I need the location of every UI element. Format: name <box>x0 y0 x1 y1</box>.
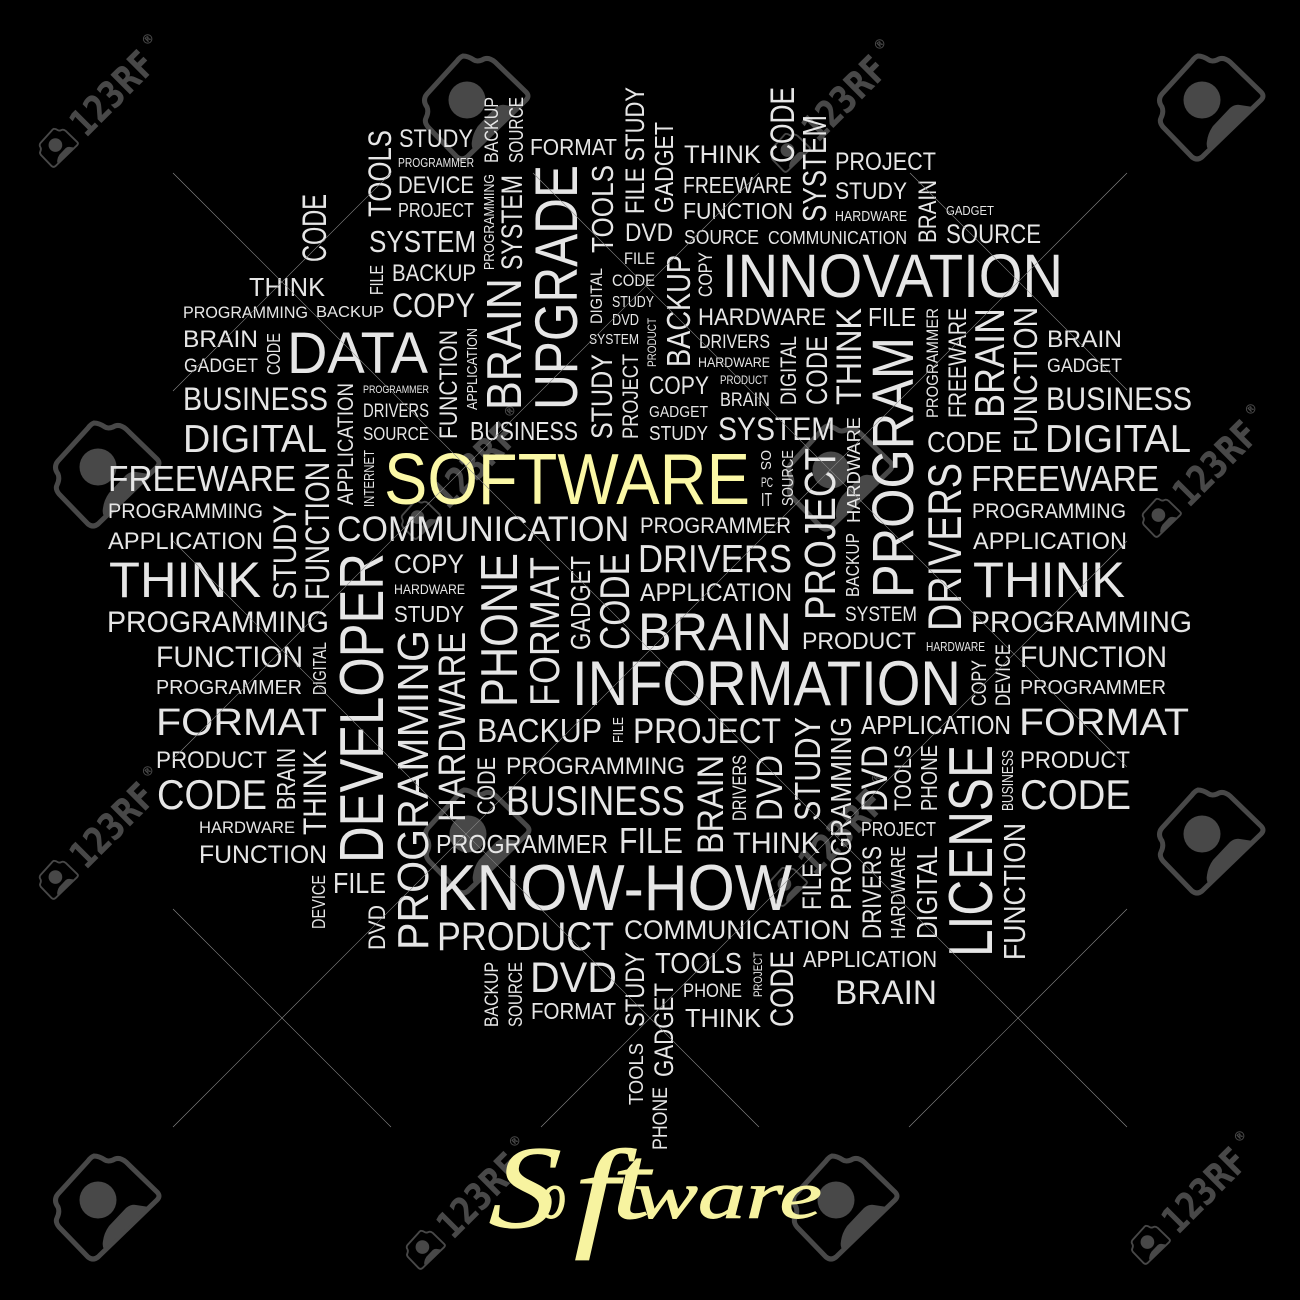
word: top-right words: FUNCTION <box>683 198 793 224</box>
word: center words: IT <box>761 490 772 510</box>
word: top-left vertical words: FILE STUDY <box>620 87 650 214</box>
word: top-right words: COMMUNICATION <box>768 228 907 248</box>
word: bottom words: BACKUP <box>482 962 503 1027</box>
word: lower center words: HARDWARE <box>432 632 474 822</box>
word: lower center words: PROGRAMMING <box>389 630 438 950</box>
word: top-right words: PROGRAMMER <box>923 308 942 418</box>
word: top-left horizontal words: PROJECT <box>398 200 474 222</box>
word: left column words: DATA <box>287 321 428 386</box>
word: left column words: FREEWARE <box>108 458 296 499</box>
title: Software: o <box>540 1157 566 1233</box>
word: top-left vertical words: TOOLS <box>362 130 398 217</box>
word: top-left vertical words <box>333 87 717 507</box>
word: top-right words: CODE <box>927 427 1002 459</box>
word: top-right words: CODE <box>801 336 834 405</box>
word: top-left horizontal words: GADGET <box>649 404 708 421</box>
word: top-right words: HARDWARE <box>698 354 770 370</box>
word: top-left vertical words: PRODUCT <box>645 317 659 367</box>
word: left column words: FUNCTION <box>199 841 327 869</box>
word: top-left horizontal words: COPY <box>649 372 709 400</box>
word: center words: COMMUNICATION <box>337 510 629 549</box>
word: top-left vertical words: BACKUP <box>482 97 503 163</box>
word: right column words: DIGITAL <box>1045 418 1191 461</box>
word: bottom words: GADGET <box>649 983 679 1077</box>
word: left column words: BACKUP <box>316 304 384 321</box>
word: top-left vertical words: APPLICATION <box>333 383 358 505</box>
word: center words: FORMAT <box>521 557 568 706</box>
word: left column words: PROGRAMMING <box>107 606 329 639</box>
word: top-left vertical words: APPLICATION <box>464 328 481 410</box>
word: center words: PHONE <box>471 553 529 707</box>
word: center words: PROGRAMMER <box>640 513 791 538</box>
word: top-left vertical words: INTERNET <box>361 450 378 507</box>
word: top-left horizontal words: STUDY <box>399 125 473 153</box>
word: center words: PRODUCT <box>802 628 916 655</box>
word: lower center words <box>389 630 1011 950</box>
word: left column words: CODE <box>264 333 284 375</box>
word: right column words: PROGRAMMING <box>972 500 1126 523</box>
word cloud <box>107 87 1192 1150</box>
word: top-right words: PROJECT <box>835 148 936 176</box>
word: left column words: BRAIN <box>271 748 301 810</box>
word: left column words: THINK <box>297 750 333 835</box>
word: bottom words: TOOLS <box>655 948 742 980</box>
word: lower center words: PROGRAMMER <box>436 829 608 859</box>
word: lower center words: BRAIN <box>690 755 731 854</box>
word: lower center words: DVD <box>749 755 790 821</box>
word: right column words: FUNCTION <box>1020 641 1167 674</box>
word: right column words: DEVICE <box>992 644 1015 706</box>
word: bottom words: FORMAT <box>531 998 616 1024</box>
word: top-right words: HARDWARE <box>698 304 826 331</box>
word: top-right words: STUDY <box>835 178 907 205</box>
word: lower center words: PROGRAMMING <box>826 717 858 910</box>
word: left column words: HARDWARE <box>199 818 295 837</box>
word: lower center words: FILE <box>610 717 627 743</box>
word: left column words: DEVICE <box>309 875 329 929</box>
word: top-left vertical words: TOOLS <box>585 165 620 253</box>
word: lower center words: STUDY <box>787 717 828 821</box>
word: KNOW-HOW: KNOW-HOW <box>436 851 793 924</box>
word: top-right words: DIGITAL <box>776 336 801 405</box>
word: lower center words: DRIVERS <box>730 755 751 821</box>
word: left column words: FUNCTION <box>299 462 337 600</box>
word: center words: HARDWARE <box>926 639 985 654</box>
word: top-left vertical words: FUNCTION <box>435 330 463 439</box>
word: bottom words: PHONE <box>649 1087 672 1150</box>
word: bottom words: THINK <box>685 1003 762 1033</box>
word: center words: APPLICATION <box>640 579 792 607</box>
word: PROGRAM: PROGRAM <box>861 337 926 598</box>
word: right column words: THINK <box>973 552 1125 608</box>
word: lower center words: THINK <box>733 827 820 860</box>
word: top-left horizontal words: FORMAT <box>530 134 617 160</box>
word: left column words <box>107 194 428 950</box>
word: top-left vertical words: BRAIN <box>478 278 532 410</box>
word: right column words: FREEWARE <box>971 458 1159 499</box>
word: center words <box>337 417 985 707</box>
word: top-left horizontal words: SYSTEM <box>589 331 639 348</box>
word: top-left horizontal words: CODE <box>612 271 655 290</box>
word: right column words: PRODUCT <box>1020 747 1130 774</box>
word: center words: DRIVERS <box>638 538 792 581</box>
word: center words: HARDWARE <box>394 581 465 597</box>
word: right column words: PROGRAMMER <box>1020 677 1166 699</box>
word: lower center words: TOOLS <box>890 745 917 811</box>
word: lower center words: BACKUP <box>477 712 602 749</box>
word: center words: SYSTEM <box>845 603 917 626</box>
word: center words: SOURCE <box>780 450 797 506</box>
word: left column words: BUSINESS <box>183 381 328 417</box>
word: top-right words: SOURCE <box>684 227 759 249</box>
word: lower center words: APPLICATION <box>861 710 1011 740</box>
word: lower center words: DIGITAL <box>912 846 944 939</box>
word: bottom words: STUDY <box>620 952 650 1027</box>
word: INFORMATION: INFORMATION <box>572 649 961 719</box>
word: top-left vertical words: SYSTEM <box>496 175 529 270</box>
word: right column words: COPY <box>968 660 991 706</box>
word: center words: DRIVERS <box>918 463 971 631</box>
word: center words: BRAIN <box>638 603 792 662</box>
word: top-right words: THINK <box>684 141 761 169</box>
word: center words: PC <box>761 474 773 490</box>
word: left column words: THINK <box>109 552 261 608</box>
word: top-right words: THINK <box>830 308 869 405</box>
word: UPGRADE: UPGRADE <box>523 165 590 410</box>
word: lower center words: PROJECT <box>633 712 781 751</box>
word: top-right words: SOURCE <box>946 219 1041 249</box>
word: top-left horizontal words: STUDY <box>649 423 708 445</box>
word: top-left horizontal words: DVD <box>625 219 673 247</box>
word: left column words: STUDY <box>267 505 303 600</box>
word: lower center words: PHONE <box>916 745 942 811</box>
word: top-left vertical words: DIGITAL <box>587 268 606 324</box>
word: bottom words: PHONE <box>683 981 742 1002</box>
word: left column words: DIGITAL <box>310 642 330 695</box>
word: left column words: FORMAT <box>156 702 327 744</box>
word: right column words: BRAIN <box>1047 326 1122 353</box>
word: right column words: FUNCTION <box>997 823 1032 960</box>
word: LICENSE: LICENSE <box>937 745 1006 957</box>
word: lower center words: DRIVERS <box>857 846 887 939</box>
word: top-left horizontal words: STUDY <box>612 294 654 311</box>
title: Software: f <box>574 1126 636 1261</box>
word: lower center words: HARDWARE <box>888 846 910 939</box>
word: right column words: FORMAT <box>1019 702 1189 744</box>
word: top-left horizontal words: PROGRAMMER <box>363 384 429 396</box>
word: bottom words <box>437 915 937 1150</box>
word: top-left horizontal words: COPY <box>392 287 475 325</box>
word: top-left horizontal words: SOURCE <box>363 424 429 444</box>
word: SOFTWARE highlighted: SOFTWARE <box>384 440 750 520</box>
word: top-left vertical words: COPY <box>696 252 717 297</box>
word: center words: OS <box>757 450 774 470</box>
word: top-left horizontal words <box>363 125 709 446</box>
word: top-left horizontal words: BUSINESS <box>470 416 578 446</box>
word: right column words: APPLICATION <box>973 528 1127 555</box>
word: left column words: CODE <box>157 771 267 818</box>
word: top-right words: GADGET <box>946 203 994 218</box>
word: top-left horizontal words: DEVICE <box>398 172 474 199</box>
word: left column words: BRAIN <box>183 326 258 353</box>
word: bottom words: TOOLS <box>626 1043 648 1105</box>
word: top-right words: DRIVERS <box>699 332 770 353</box>
word: right column words: GADGET <box>1047 356 1122 377</box>
word: top-right words: PRODUCT <box>720 373 769 387</box>
word: center words: BACKUP <box>843 533 863 597</box>
word: top-left vertical words: SOURCE <box>506 97 528 163</box>
word: top-right words: BRAIN <box>966 308 1013 418</box>
word: right column words: BUSINESS <box>1000 750 1017 811</box>
word: top-right words <box>683 87 1044 459</box>
word: left column words: FILE <box>333 868 386 900</box>
word: top-right words: BRAIN <box>720 390 770 411</box>
word: center words: COPY <box>394 549 464 579</box>
word: center words: CODE <box>591 553 638 650</box>
word: top-right words: FREEWARE <box>683 172 792 198</box>
word: top-left vertical words: PROGRAMMING <box>481 174 498 270</box>
word: lower center words: DVD <box>854 745 895 812</box>
word: left column words: DVD <box>364 905 391 950</box>
word: bottom words: PRODUCT <box>437 915 614 959</box>
word: left column words: FUNCTION <box>156 641 303 674</box>
word: lower center words: PROJECT <box>861 819 936 841</box>
word: left column words: CODE <box>296 194 334 262</box>
word: lower center words: FILE <box>619 820 683 861</box>
word: bottom words: SOURCE <box>506 962 527 1027</box>
word: lower center words: BUSINESS <box>506 777 685 824</box>
word: center words: HARDWARE <box>844 417 864 523</box>
word: left column words: PRODUCT <box>156 747 267 774</box>
word: top-right words: HARDWARE <box>835 208 907 225</box>
word: bottom words: COMMUNICATION <box>624 915 850 945</box>
word: left column words: PROGRAMMING <box>108 500 263 523</box>
word: top-left vertical words: FILE <box>367 265 387 295</box>
word: DEVELOPER: DEVELOPER <box>328 553 397 863</box>
word: top-left horizontal words: BACKUP <box>392 260 476 287</box>
word: bottom words: CODE <box>764 951 800 1027</box>
word: left column words: PROGRAMMING <box>183 303 308 322</box>
word: top-right words: BRAIN <box>914 180 942 243</box>
word: center words: STUDY <box>394 601 464 627</box>
title: Software: ware <box>634 1157 822 1233</box>
word: top-left horizontal words: SYSTEM <box>369 224 476 259</box>
word: top-left vertical words: PROJECT <box>618 354 643 439</box>
word: top-left horizontal words: FILE <box>624 249 655 268</box>
word: right column words: CODE <box>1020 771 1131 818</box>
word: top-left vertical words: GADGET <box>649 122 679 213</box>
word: right column words: PROGRAMMING <box>971 606 1192 639</box>
word: top-right words: SYSTEM <box>718 411 835 447</box>
word: right column words: BUSINESS <box>1046 381 1192 417</box>
word: left column words: APPLICATION <box>108 528 263 555</box>
word: right column words <box>968 326 1192 960</box>
word: top-right words: FREEWARE <box>944 308 972 418</box>
word: left column words: GADGET <box>184 356 258 377</box>
word: lower center words: PROGRAMMING <box>506 753 685 780</box>
word: top-right words: SYSTEM <box>796 115 833 222</box>
word: top-right words: CODE <box>764 87 802 163</box>
word: top-right words: FUNCTION <box>1007 307 1044 453</box>
word: bottom words: DVD <box>530 954 617 1002</box>
word: center words: GADGET <box>565 556 596 650</box>
word: bottom words: APPLICATION <box>803 946 937 972</box>
word: bottom words: BRAIN <box>835 974 937 1012</box>
word: left column words: PROGRAMMER <box>156 677 302 699</box>
word: lower center words: FILE <box>797 863 827 910</box>
title: Software: S <box>485 1122 565 1253</box>
title: Software <box>485 1122 822 1261</box>
word: top-right words: FILE <box>868 302 916 332</box>
title: Software: t <box>612 1124 654 1241</box>
word: left column words: THINK <box>249 272 326 302</box>
word: INNOVATION: INNOVATION <box>722 242 1063 310</box>
word: center words: PROJECT <box>796 448 845 620</box>
word: lower center words: CODE <box>473 757 501 815</box>
word: top-left horizontal words: PROGRAMMER <box>398 156 474 170</box>
word: top-left vertical words: BACKUP <box>660 255 697 367</box>
word: bottom words: PROJECT <box>751 951 765 997</box>
word: top-left vertical words: STUDY <box>586 354 619 439</box>
word: top-left horizontal words: DVD <box>612 312 639 329</box>
word: top-left horizontal words: DRIVERS <box>363 401 429 422</box>
word: left column words: DIGITAL <box>183 418 327 461</box>
